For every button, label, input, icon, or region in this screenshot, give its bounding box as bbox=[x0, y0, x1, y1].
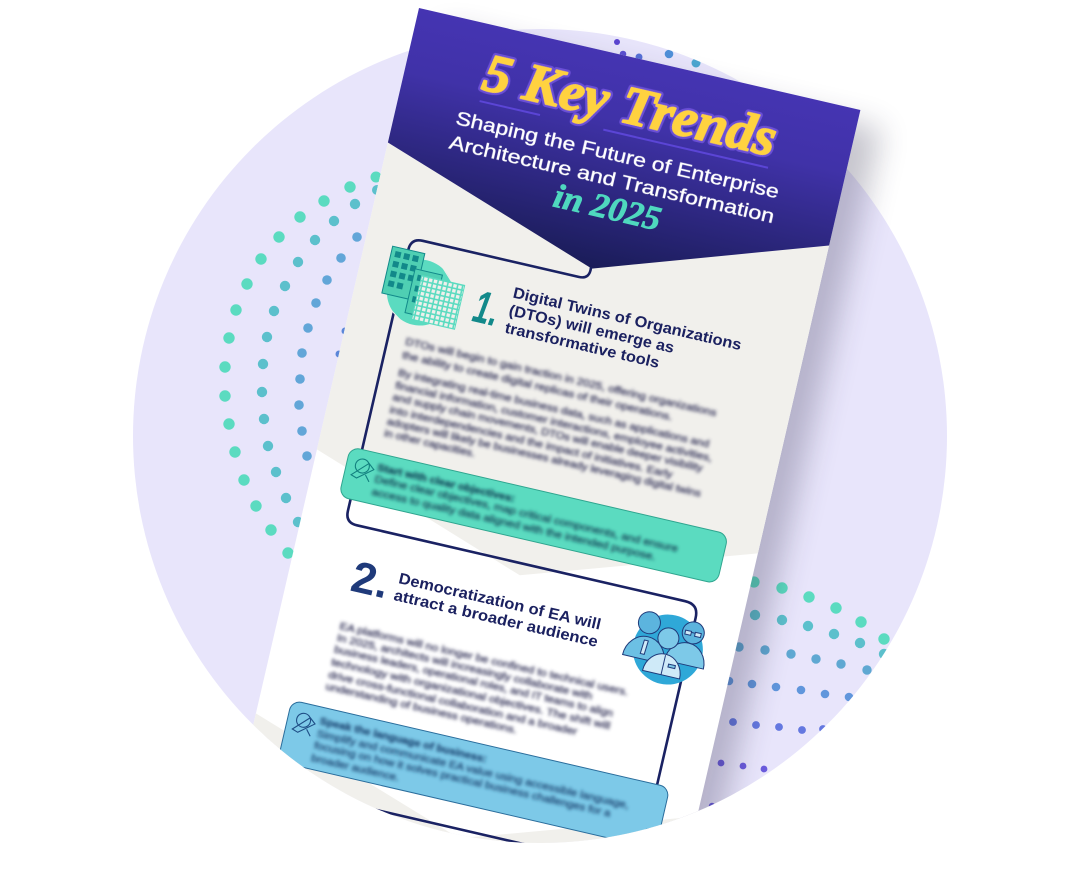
top dots bbox=[614, 39, 700, 68]
icon: compass and pen bbox=[350, 457, 376, 482]
body text 1: adopters will likely be businesses already leveraging digital twins bbox=[386, 417, 702, 500]
subtitle: Shaping the Future of Enterprise bbox=[454, 107, 781, 203]
body text 2: understanding of business operations. bbox=[324, 682, 518, 736]
title underline left bbox=[480, 101, 540, 115]
grey band section 1 bbox=[317, 135, 831, 575]
callout 2 text: Simplify and communicate EA value using accessible language, bbox=[316, 729, 630, 812]
body text 2: technology with organizational objectives. The shift will bbox=[330, 657, 611, 732]
background circle bbox=[133, 29, 947, 843]
icon: compass and pen bbox=[292, 711, 317, 737]
heading 1: Digital Twins of Organizations bbox=[511, 285, 743, 354]
page content bbox=[280, 52, 779, 838]
heading 1: (DTOs) will emerge as bbox=[507, 302, 676, 357]
body text 2: business leaders, operational roles, and IT teams to align bbox=[333, 645, 614, 720]
callout 2 text bbox=[309, 716, 629, 818]
callout 2 text: broader audience. bbox=[310, 753, 400, 784]
title: 5 Key Trends bbox=[478, 42, 782, 168]
callout 1 text: access to quality data aligned with the intended purpose. bbox=[370, 487, 656, 563]
subtitle: Architecture and Transformation bbox=[447, 132, 776, 228]
title underline right bbox=[603, 130, 768, 168]
body text 1: DTOs will begin to gain traction in 2025, offering organizations bbox=[404, 337, 717, 419]
header banner bbox=[388, 8, 860, 269]
heading 2: Democratization of EA will bbox=[397, 570, 603, 634]
grey band section 3 bbox=[254, 714, 679, 843]
body text 1: financial information, customer interactions, employee activities, bbox=[394, 381, 713, 464]
body text 2 bbox=[324, 620, 628, 737]
dot pattern bbox=[219, 39, 890, 809]
callout 1 bbox=[339, 447, 728, 584]
tilted infographic page bbox=[231, 8, 881, 872]
callout 2 text: Speak the language of business: bbox=[318, 716, 488, 765]
callout 2 text: focusing on how it solves practical business challenges for a bbox=[313, 740, 612, 820]
heading 1: transformative tools bbox=[503, 320, 661, 372]
callout 1 text: Define clear objectives, map critical components, and ensure bbox=[373, 474, 679, 555]
icon: people group bbox=[622, 611, 705, 684]
body text 1: in other capacities. bbox=[383, 428, 476, 460]
page sheet bbox=[256, 36, 856, 837]
left dots third arc bbox=[294, 232, 362, 461]
icon: buildings and grid bbox=[381, 246, 466, 330]
body text 2: In 2025, architects will increasingly collaborate with bbox=[336, 633, 593, 703]
left dots outer arc bbox=[219, 172, 382, 559]
number 1: 1. bbox=[469, 280, 505, 336]
left dots second arc bbox=[257, 185, 382, 527]
title: 5 Key Trends bbox=[478, 42, 782, 168]
year label: in 2025 bbox=[550, 178, 665, 238]
body text 1: into interdependencies and the impact of initiatives. Early bbox=[388, 405, 673, 481]
body text 1: and supply chain movements, DTOs will enable deeper visibility bbox=[391, 392, 704, 475]
body text 1 bbox=[383, 337, 723, 512]
number 2: 2. bbox=[347, 552, 394, 608]
body text 2: EA platforms will no longer be confined to technical users. bbox=[338, 621, 629, 699]
callout 1 text: Start with clear objectives: bbox=[376, 463, 516, 505]
subtitle bbox=[447, 107, 782, 228]
body text 1: the ability to create digital replicas of their operations. bbox=[401, 350, 673, 423]
connector outline bbox=[346, 239, 698, 843]
page shadow bbox=[464, 18, 892, 818]
callout 1 text bbox=[370, 463, 682, 568]
body text 1: By integrating real-time business data, such as applications and bbox=[397, 368, 710, 450]
section 1 bbox=[335, 246, 775, 584]
body text 2: drive cross-functional collaboration and a broader bbox=[327, 670, 579, 738]
heading 2: attract a broader audience bbox=[392, 587, 600, 651]
right dots bbox=[709, 576, 890, 809]
section 2 bbox=[280, 562, 705, 838]
callout 2 bbox=[278, 700, 670, 849]
